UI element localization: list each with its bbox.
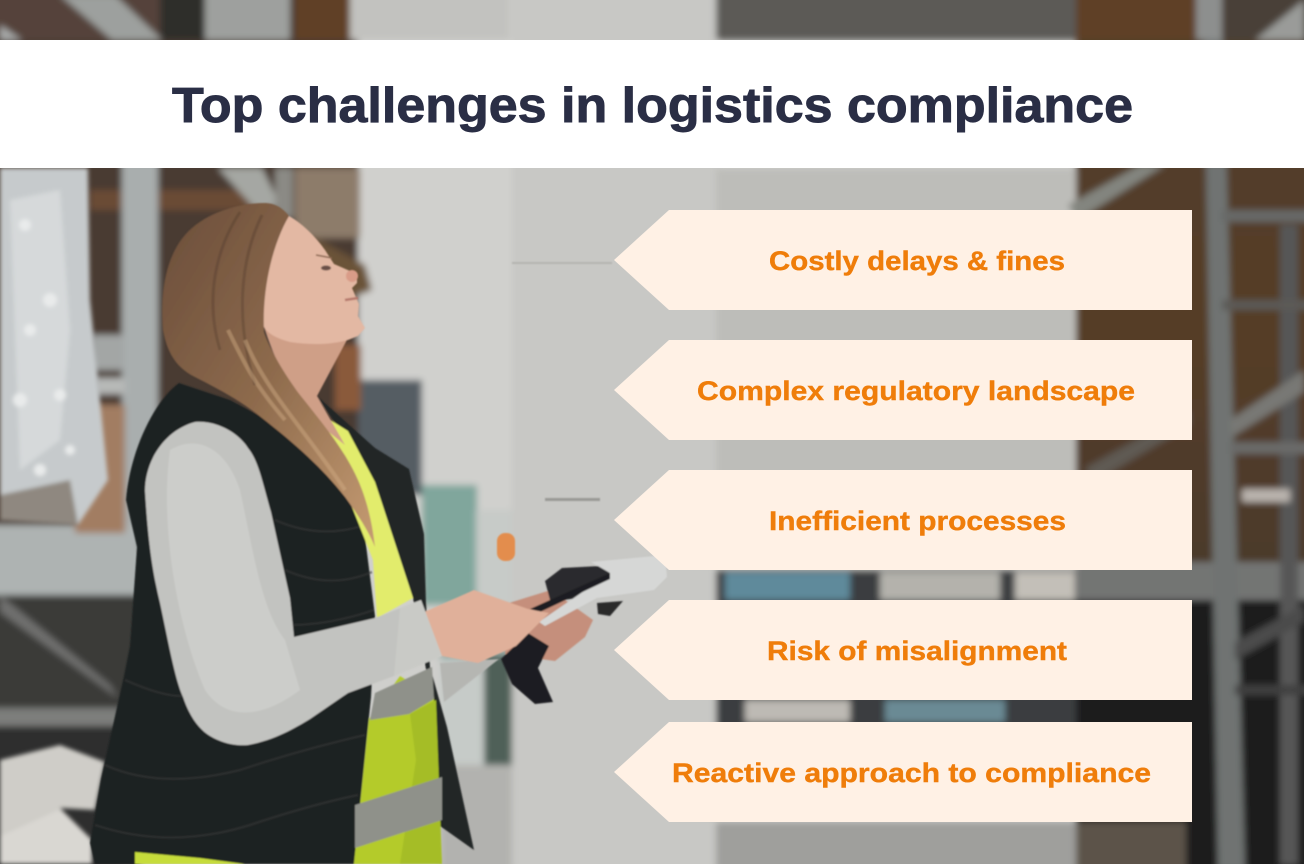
title: Top challenges in logistics compliance <box>172 79 1133 133</box>
callout arrow 1: Costly delays & fines: Costly delays & fines <box>769 246 1065 276</box>
callout arrow 3: Inefficient processes <box>614 470 1192 570</box>
scanner body <box>545 566 610 600</box>
vest main <box>90 383 375 864</box>
callout arrow 4: Risk of misalignment <box>614 600 1192 700</box>
vest right panel <box>317 396 474 850</box>
callout arrow 1: Costly delays & fines <box>614 210 1192 310</box>
callout arrow 3: Inefficient processes: Inefficient processes <box>769 506 1066 536</box>
near hand <box>422 590 549 663</box>
seam lines on pillar <box>497 262 612 561</box>
hi-vis lower <box>354 676 442 864</box>
callout arrow 4: Risk of misalignment: Risk of misalignment <box>767 636 1067 666</box>
quilting <box>95 520 374 838</box>
title band <box>0 40 1304 168</box>
tablet <box>539 555 667 626</box>
far sleeve <box>440 659 499 702</box>
hair <box>162 203 375 547</box>
cuff <box>394 600 442 676</box>
callout arrow 5: Reactive approach to compliance <box>614 722 1192 822</box>
sacks <box>0 745 105 864</box>
pallet wrap <box>0 168 108 525</box>
callout arrow 5: Reactive approach to compliance: Reactive approach to compliance <box>672 758 1151 788</box>
sleeve <box>145 422 442 745</box>
person: woman with scanner <box>90 203 667 864</box>
callout arrow 2: Complex regulatory landscape <box>614 340 1192 440</box>
face <box>262 216 365 344</box>
hi-vis upper <box>313 409 413 618</box>
neck <box>262 320 348 445</box>
scanner handle <box>501 633 553 704</box>
callout arrow 2: Complex regulatory landscape: Complex regulatory landscape <box>697 376 1135 406</box>
hand far <box>505 590 593 661</box>
